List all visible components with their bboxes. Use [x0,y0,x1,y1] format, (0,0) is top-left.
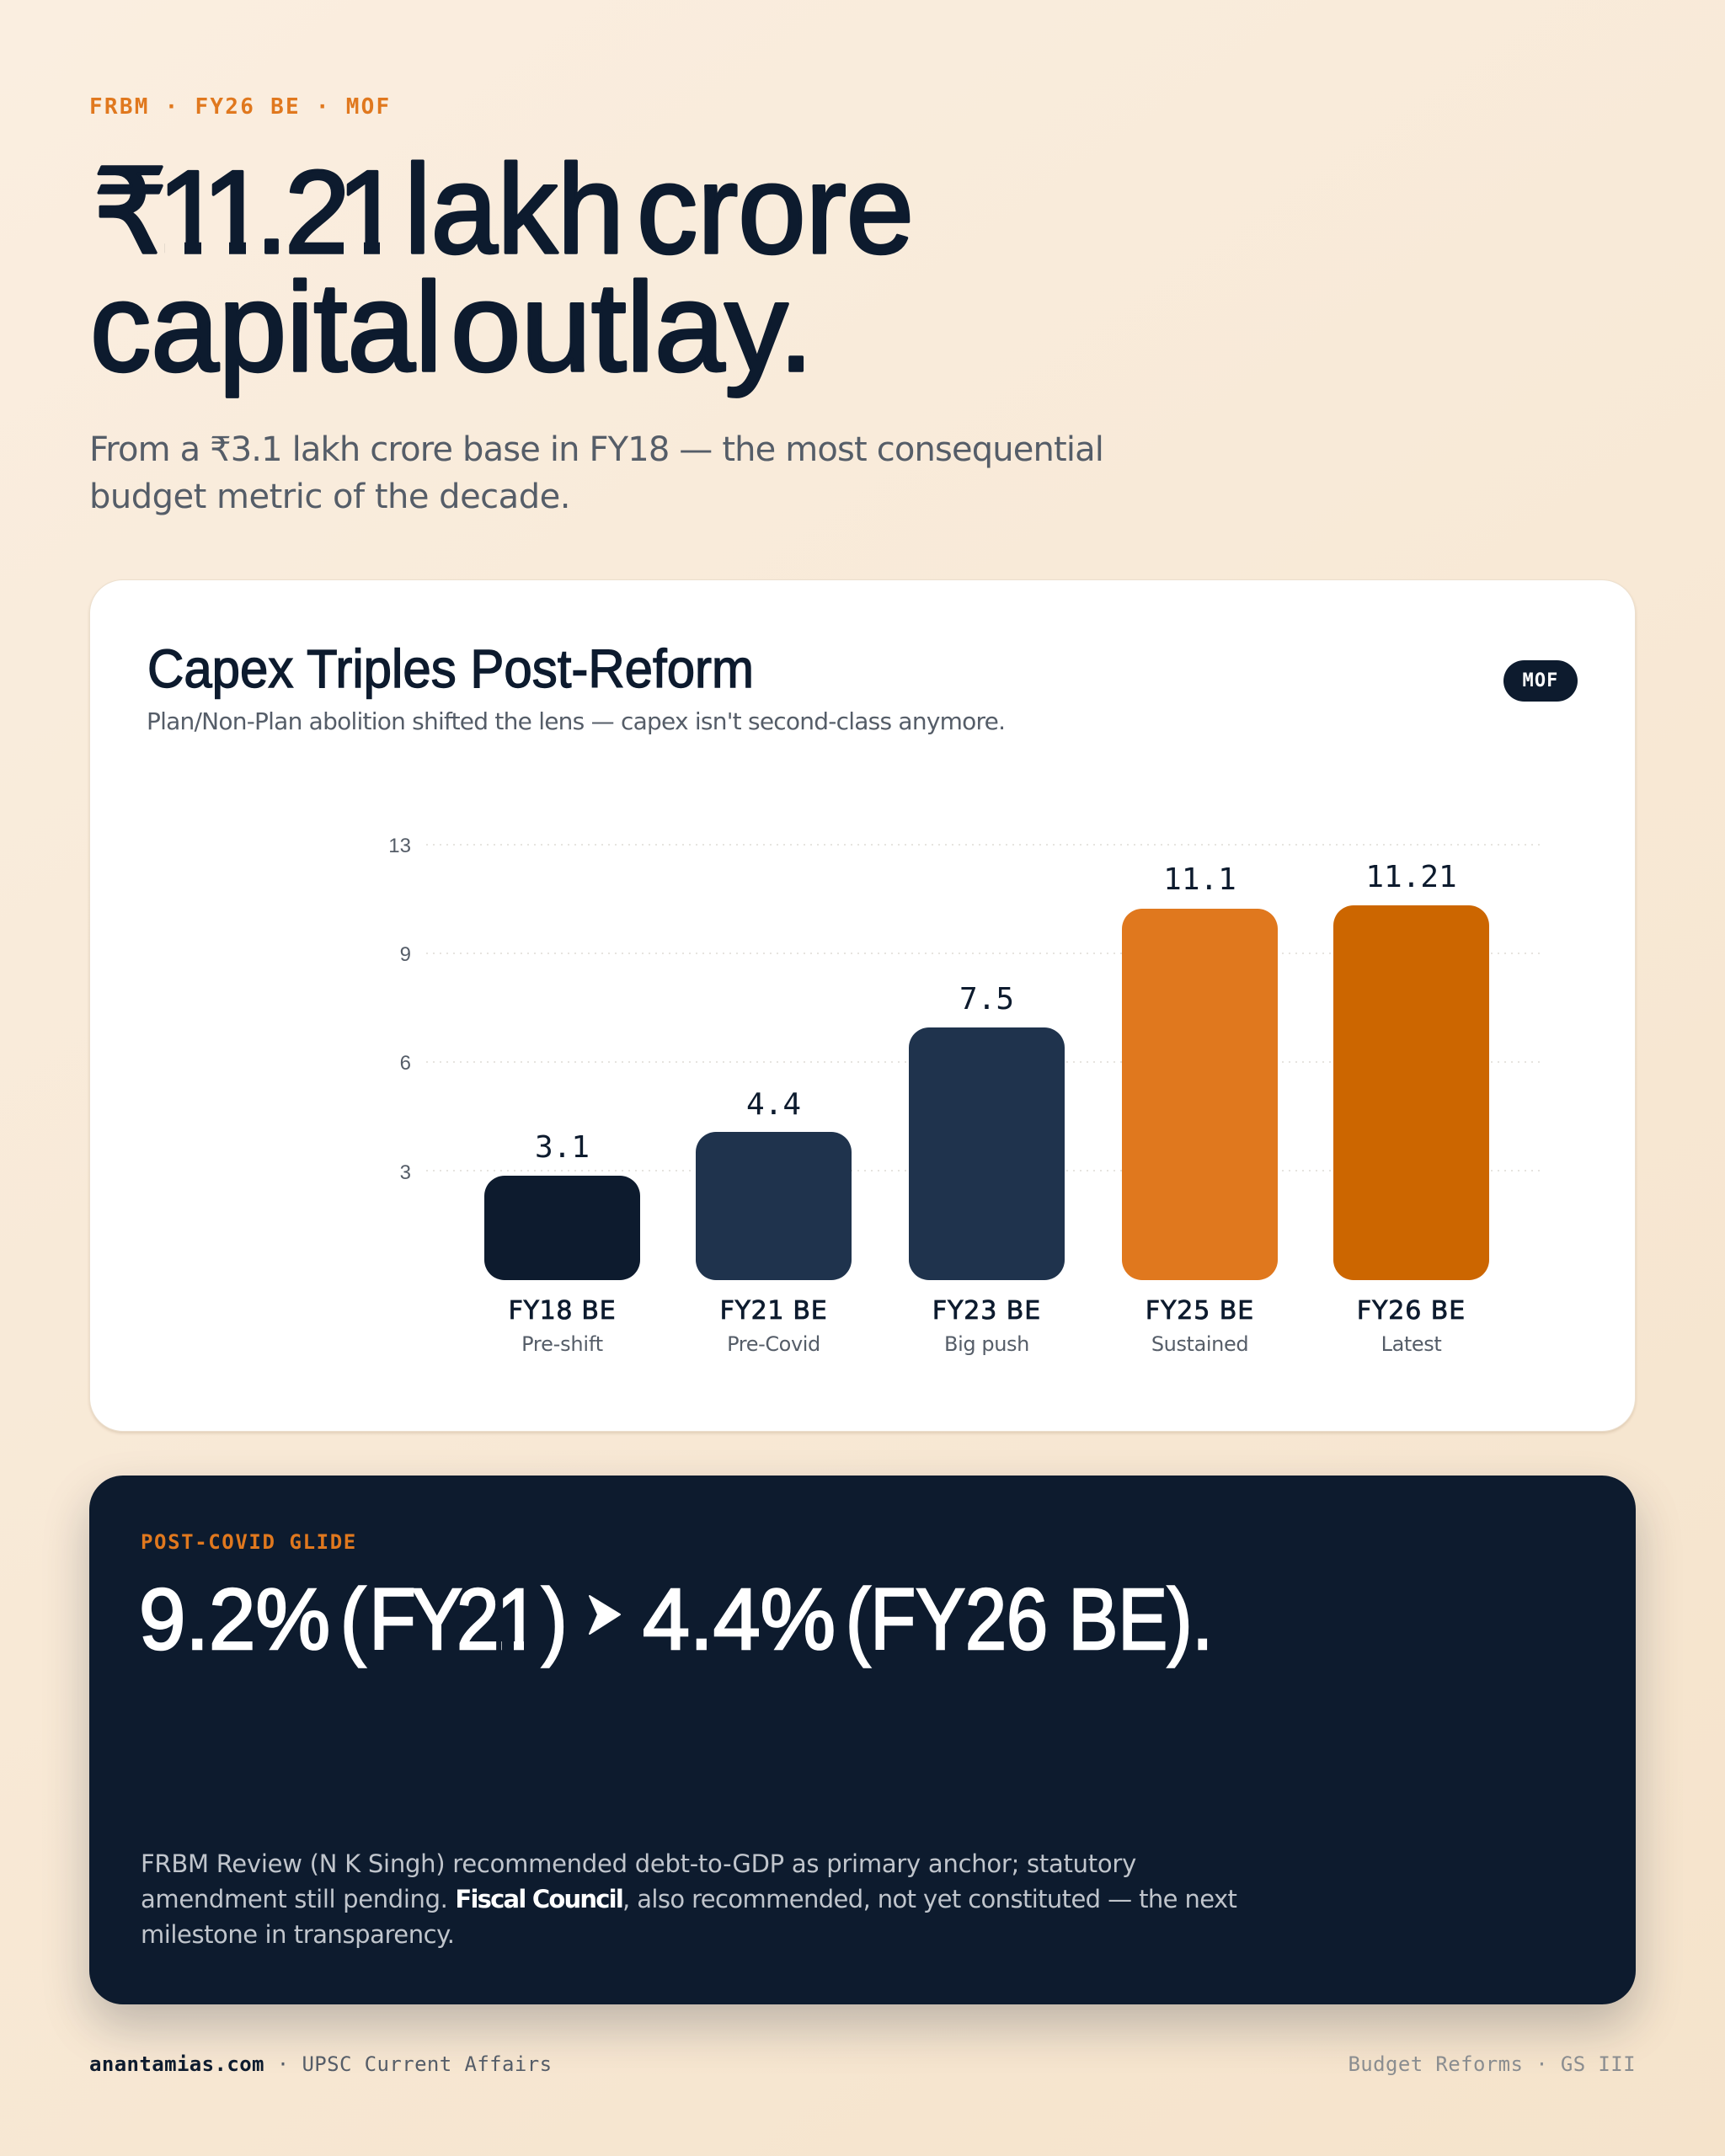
subtitle [89,430,1103,516]
bar: FY25 BE: Sustained [1151,1332,1248,1356]
bar: FY25 BE: FY25 BE [1146,1296,1254,1326]
y axis labels: 9 [400,943,411,966]
y axis labels: 3 [400,1161,411,1184]
bar: FY25 BE [1122,862,1278,1356]
subtitle: From a ₹3.1 lakh crore base in FY18 — the most consequential [89,430,1103,469]
bar: FY23 BE: Big push [944,1332,1029,1356]
title: capital [90,256,442,398]
panel headline: (FY21) [340,1571,568,1668]
eyebrow label: FRBM · FY26 BE · MOF [89,94,391,120]
bar: FY18 BE: FY18 BE [509,1296,616,1326]
bar: FY18 BE: Pre-shift [521,1332,603,1356]
bar: FY18 BE: 3.1 [535,1130,590,1165]
panel body text: amendment still pending. Fiscal Council, also recommended, not yet constituted — the next [141,1885,1236,1913]
y axis labels [388,835,411,1184]
footer right: Budget Reforms · GS III [1348,2052,1636,2076]
bar chart [388,835,1540,1356]
bar: FY26 BE: 11.21 [1365,860,1457,894]
panel body text: milestone in transparency. [141,1920,455,1949]
bar: FY21 BE: 4.4 [746,1087,801,1122]
bar: FY23 BE [909,982,1065,1356]
source badge: MOF [1522,670,1559,691]
title: ₹11.21 [93,146,403,278]
y axis labels: 13 [388,835,411,857]
panel headline: 4.4% [643,1571,836,1668]
bar: FY26 BE: FY26 BE [1357,1296,1466,1326]
bar: FY26 BE: Latest [1381,1332,1441,1356]
panel headline: 9.2% [139,1571,330,1668]
panel body text [141,1849,1236,1949]
source badge [1503,660,1578,702]
footer left: anantamias.com · UPSC Current Affairs [89,2052,552,2076]
bar: FY23 BE: FY23 BE [932,1296,1041,1326]
title: outlay. [451,256,814,398]
bar: FY21 BE: FY21 BE [720,1296,827,1326]
y axis labels: 6 [400,1052,411,1075]
icon: arrow [590,1596,620,1634]
panel heading [147,638,1006,735]
panel: capex chart [89,579,1636,1432]
panel body text: FRBM Review (N K Singh) recommended debt-to-GDP as primary anchor; statutory [141,1849,1136,1878]
bar: FY25 BE: 11.1 [1163,862,1236,897]
bar: FY18 BE [484,1130,640,1356]
panel eyebrow: POST-COVID GLIDE [141,1530,357,1554]
panel heading: Capex Triples Post-Reform [147,638,754,699]
panel: post-Covid glide [89,1476,1636,2004]
panel headline [139,1571,1213,1668]
bar: FY26 BE [1333,860,1489,1356]
bar: FY21 BE [696,1087,852,1356]
bar: FY21 BE: Pre-Covid [727,1332,820,1356]
subtitle: budget metric of the decade. [89,478,570,516]
bar: FY23 BE: 7.5 [959,982,1014,1017]
title [90,143,914,398]
panel description: Plan/Non-Plan abolition shifted the lens — capex isn't second-class anymore. [147,707,1006,735]
